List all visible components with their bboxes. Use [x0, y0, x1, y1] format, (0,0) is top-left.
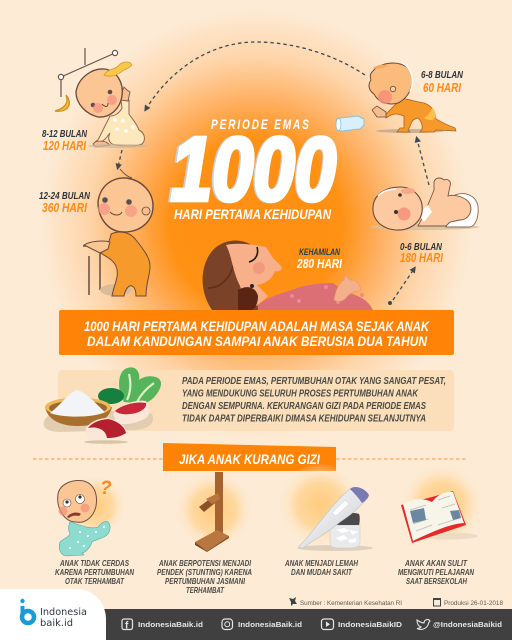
cycle arrows [118, 42, 429, 300]
caption: pelajaran: ANAK AKAN SULIT [404, 558, 468, 568]
footer bar [100, 609, 512, 640]
social: facebook: IndonesiaBaik.id [138, 620, 203, 629]
hand [118, 87, 130, 101]
pregnant mother lying down [203, 241, 373, 310]
icon: open book [401, 491, 478, 543]
label: 0-6 bulan: 180 HARI [400, 250, 443, 265]
logo text: baik.id [40, 618, 73, 629]
label: 0-6 bulan [400, 242, 443, 265]
body [250, 283, 373, 310]
baby 6-8 months crawling [369, 63, 456, 133]
social: twitter: @IndonesiaBaikid [433, 620, 502, 629]
caption: stunting: PENDEK (STUNTING) KARENA [157, 567, 252, 577]
head [373, 187, 422, 230]
orange suit [101, 232, 150, 296]
label: 12-24 bulan: 12-24 BULAN [39, 191, 91, 202]
label: kehamilan: KEHAMILAN [299, 247, 341, 258]
eyelash [249, 247, 258, 262]
caption: lemah [284, 558, 359, 577]
salt [50, 390, 105, 417]
label: 6-8 bulan [421, 70, 464, 95]
legs and body [418, 178, 471, 226]
title: periode emas: PERIODE EMAS [211, 116, 309, 132]
mobile toy [55, 48, 132, 111]
hand [372, 106, 386, 117]
baby 0-6 months lying down [371, 178, 479, 230]
nutrition text [182, 376, 446, 424]
label: 12-24 bulan [39, 191, 91, 215]
social: youtube [322, 619, 403, 630]
title: 1000: 1000 [171, 120, 336, 220]
caption: cerdas: KARENA PERTUMBUHAN [55, 567, 135, 577]
icon: food group [44, 367, 161, 444]
production date [433, 598, 503, 607]
social: youtube: IndonesiaBaikID [338, 620, 403, 629]
caption: lemah: DAN MUDAH SAKIT [291, 567, 353, 577]
logo text [40, 607, 87, 629]
head [76, 69, 122, 117]
social: instagram [222, 619, 302, 630]
caption: stunting [157, 558, 252, 595]
head [98, 178, 153, 232]
baby 12-24 months standing at stool [83, 169, 153, 296]
nutrition text: YANG MENDUKUNG SELURUH PROSES PERTUMBUHAN ANAK [182, 388, 419, 400]
caption: stunting: ANAK BERPOTENSI MENJADI [158, 558, 251, 568]
section ribbon: JIKA ANAK KURANG GIZI [179, 451, 321, 467]
icon: height ruler [195, 472, 229, 552]
caption: stunting: PERTUMBUHAN JASMANI [165, 576, 245, 586]
hand [334, 275, 361, 301]
bowl [45, 407, 112, 426]
caption: lemah: ANAK MENJADI LEMAH [284, 558, 359, 568]
face and neck [226, 244, 282, 306]
broccoli [98, 388, 124, 404]
label: kehamilan [296, 247, 342, 271]
panel: nutrition explanation [58, 370, 454, 431]
title [169, 116, 336, 222]
source note [289, 597, 402, 607]
thermometer [299, 488, 368, 548]
body [94, 100, 144, 146]
caption: cerdas [55, 558, 135, 586]
baby 8-12 months with mobile [55, 48, 148, 148]
small arrow dot [388, 301, 392, 305]
label: 8-12 bulan: 120 HARI [43, 138, 86, 153]
logo panel [0, 589, 106, 640]
banner [59, 310, 454, 355]
banner text [84, 318, 430, 349]
caption: cerdas: OTAK TERHAMBAT [65, 576, 125, 586]
banner text: DALAM KANDUNGAN SAMPAI ANAK BERUSIA DUA TAHUN [87, 333, 428, 349]
glow behind items [63, 463, 484, 550]
social: twitter [417, 620, 502, 629]
icon: thermometer and pills [297, 487, 373, 551]
lower hair and earring [238, 287, 258, 310]
label: 6-8 bulan: 60 HARI [423, 80, 461, 95]
caption: cerdas: ANAK TIDAK CERDAS [59, 558, 129, 568]
suit [59, 521, 110, 556]
head [58, 481, 96, 522]
head [369, 63, 412, 104]
title: subtitle: HARI PERTAMA KEHIDUPAN [174, 206, 332, 222]
caption: pelajaran: MENGIKUTI PELAJARAN [398, 567, 475, 577]
meat top [113, 401, 149, 424]
lettuce [119, 367, 161, 404]
suit [385, 98, 456, 132]
icon: confused baby [58, 478, 112, 556]
source note: Sumber : Kementerian Kesehatan RI [300, 600, 402, 607]
label: 12-24 bulan: 360 HARI [42, 200, 87, 215]
section ribbon [163, 443, 336, 471]
logo mark [20, 599, 34, 623]
caption: pelajaran: SAAT BERSEKOLAH [406, 576, 468, 586]
nutrition text: PADA PERIODE EMAS, PERTUMBUHAN OTAK YANG SANGAT PESAT, [182, 376, 446, 387]
question mark: ? [100, 478, 112, 499]
central orange glow [30, 10, 482, 440]
social: instagram: IndonesiaBaik.id [238, 620, 302, 629]
caption: stunting: TERHAMBAT [186, 585, 225, 595]
label: 8-12 bulan [42, 129, 88, 153]
stool [83, 246, 112, 295]
hair [203, 241, 258, 310]
social: facebook [122, 619, 203, 632]
social: facebook: f [125, 620, 129, 632]
label: 0-6 bulan: 0-6 BULAN [400, 242, 443, 253]
banner text: 1000 HARI PERTAMA KEHIDUPAN ADALAH MASA SEJAK ANAK [84, 318, 430, 334]
production date: Produksi 26-01-2018 [444, 600, 503, 607]
jar [330, 525, 360, 548]
label: 6-8 bulan: 6-8 BULAN [421, 70, 464, 81]
label: 8-12 bulan: 8-12 BULAN [42, 129, 88, 140]
nutrition text: TIDAK DAPAT DIPERBAIKI DIMASA KEHIDUPAN SELANJUTNYA [182, 414, 426, 424]
meat bottom [86, 418, 127, 442]
milk bottle [336, 116, 364, 131]
logo text: Indonesia [40, 607, 87, 618]
diaper [446, 194, 478, 227]
label: kehamilan: 280 HARI [296, 256, 342, 271]
nutrition text: DENGAN SEMPURNA. KEKURANGAN GIZI PADA PERIODE EMAS [182, 401, 426, 412]
caption: pelajaran [398, 558, 475, 586]
title: number shadow: 1000 [169, 120, 335, 220]
